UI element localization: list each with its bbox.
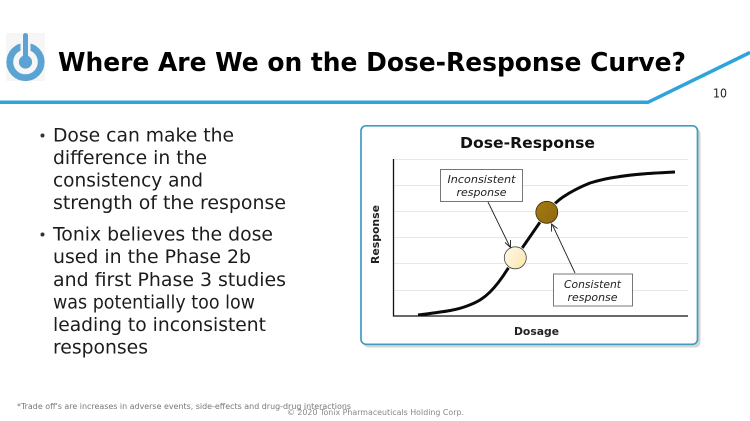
bullet: dose difference: strength of the response (53, 193, 286, 214)
axis label: response: Response (369, 205, 382, 264)
bullet list (40, 126, 286, 358)
axis label: dosage: Dosage (514, 325, 559, 338)
title: Where Are We on the Dose-Response Curve? (58, 48, 686, 78)
dose-response curve (418, 172, 675, 315)
arrow: to consistent marker (552, 224, 575, 273)
axes (394, 159, 688, 316)
bullet: dose difference: Dose can make the (53, 126, 234, 146)
callout: consistent response (554, 274, 632, 306)
bullet: Tonix belief: leading to inconsistent (53, 315, 266, 336)
bullet: dose difference: consistency and (53, 170, 203, 192)
arrow: to inconsistent marker (488, 202, 510, 248)
bullet: Tonix belief: used in the Phase 2b (53, 247, 251, 268)
marker: consistent (535, 200, 559, 224)
bullet: dose difference (40, 126, 286, 214)
marker: inconsistent (503, 246, 528, 270)
panel card (361, 126, 700, 348)
page number: 10 (713, 86, 727, 100)
footnote: *Trade off's are increases in adverse events, side-effects and drug-drug interactions (17, 401, 351, 411)
bullet: Tonix belief (40, 224, 286, 358)
bullet: Tonix belief: responses (53, 338, 148, 358)
bullet: Tonix belief: Tonix believes the dose (52, 224, 273, 246)
callout: inconsistent response: Inconsistent (448, 173, 516, 186)
bullet: Tonix belief: and first Phase 3 studies (53, 270, 286, 291)
chart title: Dose-Response (460, 134, 595, 152)
bullet: Tonix belief: was potentially too low (53, 292, 255, 314)
grid lines (393, 160, 688, 290)
callout: inconsistent response: response (456, 186, 507, 199)
bullet: dose difference: difference in the (53, 148, 207, 169)
copyright: © 2020 Tonix Pharmaceuticals Holding Corp. (287, 407, 464, 417)
panel: dose-response chart (361, 126, 700, 348)
icon: power logo (6, 33, 45, 81)
callout: inconsistent response (440, 170, 522, 202)
header rule (0, 52, 750, 102)
callout: consistent response: response (568, 291, 618, 304)
callout: consistent response: Consistent (564, 278, 622, 291)
